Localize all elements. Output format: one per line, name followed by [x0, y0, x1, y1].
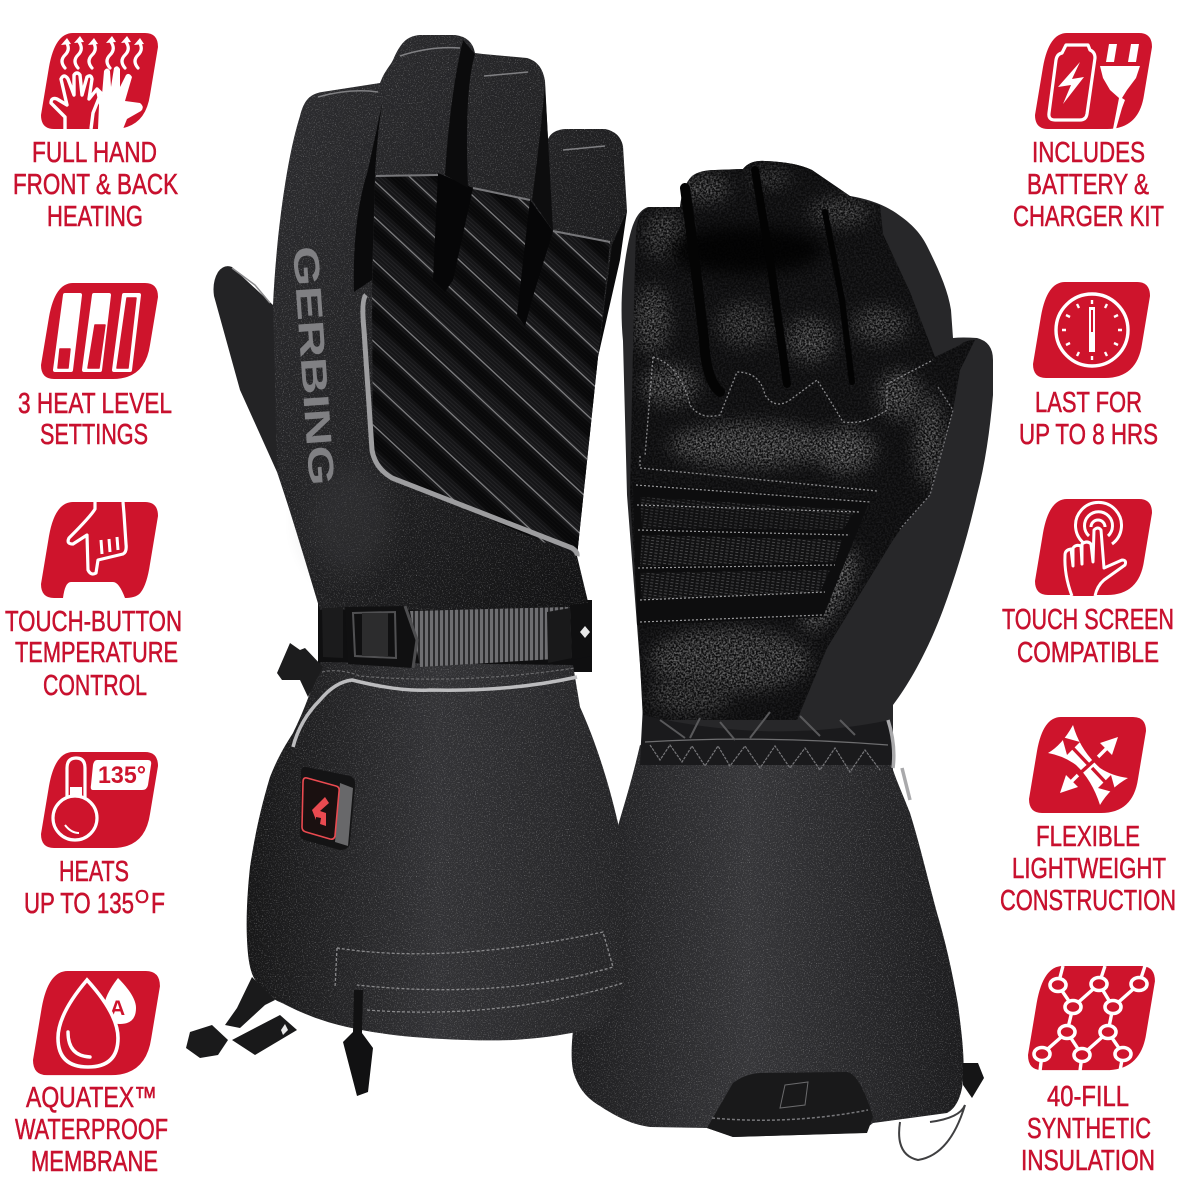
- feature: flexible construction: [1000, 717, 1176, 917]
- heat control button: [300, 767, 355, 850]
- feature: 3 heat levels: [18, 283, 172, 451]
- feature: touch screen: [1002, 499, 1174, 669]
- icon: thermometer: [41, 752, 158, 848]
- diagonal quilted patch: [372, 176, 610, 554]
- label: FLEXIBLE: [1036, 821, 1140, 853]
- label: UP TO 8 HRS: [1019, 419, 1158, 451]
- feature: battery life: [1019, 282, 1158, 451]
- left glove thumb: [214, 266, 300, 472]
- label: SYNTHETIC: [1027, 1113, 1151, 1145]
- left glove side shading: [310, 465, 390, 575]
- icon: level bars: [41, 283, 158, 379]
- feature: heats to 135F: [24, 752, 165, 920]
- cord locks: [186, 977, 297, 1058]
- icon: stretch fabric arrows: [1029, 717, 1146, 813]
- cuff pocket stitching: [335, 932, 623, 1012]
- left glove: back view: [186, 20, 630, 1096]
- label: 3 HEAT LEVEL: [18, 388, 172, 420]
- label: LAST FOR: [1035, 387, 1142, 419]
- label: INSULATION: [1021, 1145, 1155, 1177]
- icon: water drops: A: [110, 997, 125, 1020]
- label: INCLUDES: [1032, 137, 1145, 169]
- label: WATERPROOF: [15, 1114, 168, 1146]
- label: FRONT & BACK: [13, 169, 179, 201]
- finger folds: [685, 188, 720, 392]
- feature: synthetic insulation: [1021, 966, 1155, 1177]
- side buckle ring: [888, 720, 910, 800]
- label: O: [135, 887, 149, 907]
- icon: finger pressing button: [41, 502, 158, 598]
- GERBING logo: GERBING: [285, 245, 343, 487]
- icon: touch gesture: [1035, 499, 1152, 596]
- bottom leather patch: [707, 1072, 873, 1137]
- label: TEMPERATURE: [15, 637, 178, 669]
- zipper pull: [343, 990, 373, 1096]
- wrist backing behind strap: [318, 600, 592, 672]
- label: HEATS: [59, 856, 129, 888]
- right glove softshell hand: [622, 161, 993, 760]
- feature: touch-button control: [5, 502, 182, 702]
- label: SETTINGS: [40, 419, 148, 451]
- label: 40-FILL: [1047, 1081, 1129, 1113]
- left glove hand: [273, 35, 627, 610]
- icon: water drops: [33, 971, 160, 1075]
- palm heel pad: [633, 357, 953, 625]
- finger folds and seams: [232, 40, 627, 357]
- label: CONTROL: [43, 670, 147, 702]
- feature: battery and charger: [1013, 33, 1164, 233]
- icon: fibre network: [1028, 966, 1155, 1071]
- label: COMPATIBLE: [1017, 637, 1159, 669]
- label: HEATING: [47, 201, 143, 233]
- label: AQUATEX™: [26, 1082, 157, 1114]
- icon: battery and plug: [1035, 33, 1152, 129]
- feature: Aquatex membrane: [15, 971, 168, 1178]
- icon: thermometer: 135°: [98, 762, 146, 789]
- elastic wrist band: [640, 712, 893, 772]
- icon: clock: [1033, 282, 1150, 378]
- left glove gauntlet cuff: [247, 662, 628, 1040]
- label: TOUCH-BUTTON: [5, 606, 182, 638]
- label: UP TO 135: [24, 888, 134, 920]
- right glove: palm view: [572, 150, 993, 1160]
- drawstring loop: [899, 1063, 984, 1160]
- wrist strap: [322, 603, 592, 668]
- label: MEMBRANE: [31, 1146, 158, 1178]
- reflective piping: [363, 295, 577, 556]
- icon: hands with heat waves: [41, 33, 158, 129]
- right glove leather palm: [630, 160, 975, 720]
- label: FULL HAND: [32, 137, 157, 169]
- right glove gauntlet cuff: [572, 720, 964, 1137]
- feature: full hand heating: [13, 33, 179, 233]
- cuff seam stitches: [322, 668, 575, 679]
- side clip buckle: [277, 643, 323, 697]
- label: F: [151, 888, 165, 920]
- cuff reflective piping: [293, 677, 577, 747]
- label: BATTERY &: [1027, 169, 1149, 201]
